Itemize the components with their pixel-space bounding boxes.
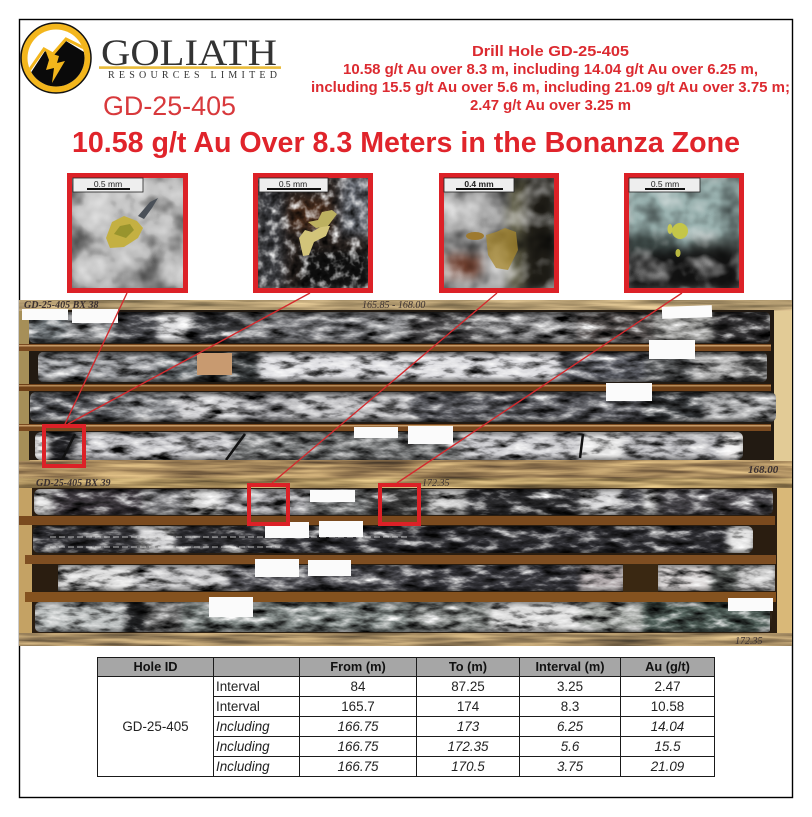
results table: 165.7 [341, 698, 375, 714]
scale bar: 0.5 mm [651, 179, 679, 189]
red sample locator boxes [44, 426, 419, 524]
results table: 3.25 [557, 678, 583, 694]
sample tags [22, 305, 773, 617]
tagline: RESOURCES LIMITED [108, 70, 277, 81]
results table: 10.58 [651, 698, 684, 714]
results table: Including [216, 718, 270, 734]
handwritten box markings: GD-25-405 BX 39 [36, 478, 110, 489]
results table: Interval [216, 698, 260, 714]
core row 7 [58, 565, 775, 591]
core row 8 [35, 602, 772, 632]
handwritten box markings [24, 300, 779, 647]
results table: Au (g/t) [645, 659, 690, 674]
results table: Interval [216, 678, 260, 694]
tray dividers [19, 344, 776, 602]
results table: 84 [351, 678, 365, 694]
results table: 166.75 [338, 718, 378, 734]
results table: 21.09 [651, 758, 684, 774]
results table: 6.25 [557, 718, 583, 734]
results table: 87.25 [451, 678, 485, 694]
scale bar: 0.5 mm [94, 179, 122, 189]
leader lines [65, 293, 682, 483]
wordmark: GOLIATH [101, 33, 277, 74]
drill hole summary text: Drill Hole GD-25-405 [472, 43, 629, 60]
microphotograph 3 [441, 176, 557, 290]
main title: 10.58 g/t Au Over 8.3 Meters in the Bonanza Zone [72, 127, 740, 159]
icon: mountain and lightning roundel [20, 23, 92, 100]
results table: To (m) [449, 659, 487, 674]
results table [97, 657, 715, 777]
microphotograph 1 [70, 176, 186, 290]
microphotograph 4 [626, 176, 742, 290]
results table: Including [216, 738, 270, 754]
results table: 3.75 [557, 758, 583, 774]
results table: 170.5 [451, 758, 485, 774]
results table: Hole ID [133, 659, 178, 674]
core row 1 [29, 312, 770, 343]
drill hole summary text: 2.47 g/t Au over 3.25 m [470, 98, 631, 114]
core row 2 [38, 352, 767, 382]
logo: Goliath Resources [20, 23, 281, 100]
hole ID heading: GD-25-405 [103, 91, 236, 121]
drill hole summary text: including 15.5 g/t Au over 5.6 m, including 21.09 g/t Au over 3.75 m; [311, 80, 790, 96]
results table: 166.75 [338, 758, 378, 774]
results table: Interval (m) [536, 659, 604, 674]
results table: GD-25-405 [122, 718, 189, 734]
results table: 172.35 [448, 738, 488, 754]
core row 5 [34, 489, 773, 515]
core row 4 [35, 432, 743, 460]
results table: 5.6 [561, 738, 579, 754]
handwritten box markings: 172.35 [735, 636, 762, 647]
results table: 15.5 [654, 738, 681, 754]
results table: From (m) [330, 659, 386, 674]
core row 3 [30, 392, 776, 422]
microphotograph 2 [255, 176, 371, 290]
results table: 174 [457, 698, 479, 714]
drill hole summary text [311, 43, 790, 114]
wood tray background [19, 300, 792, 646]
results table: 173 [457, 718, 479, 734]
results table: 2.47 [654, 678, 681, 694]
core box photograph [19, 300, 792, 647]
results table: 14.04 [651, 718, 684, 734]
handwritten box markings: 168.00 [748, 464, 779, 476]
results table: 166.75 [338, 738, 378, 754]
handwritten box markings: GD-25-405 BX 38 [24, 300, 98, 311]
scale bar: 0.4 mm [464, 179, 494, 189]
handwritten box markings: 165.85 - 168.00 [362, 300, 425, 311]
drill hole summary text: 10.58 g/t Au over 8.3 m, including 14.04 g/t Au over 6.25 m, [343, 62, 758, 78]
handwritten box markings: 172.35 [422, 478, 450, 489]
core row 6 [33, 526, 753, 553]
scale bar: 0.5 mm [279, 179, 307, 189]
results table: 8.3 [561, 698, 579, 714]
results table: Including [216, 758, 270, 774]
